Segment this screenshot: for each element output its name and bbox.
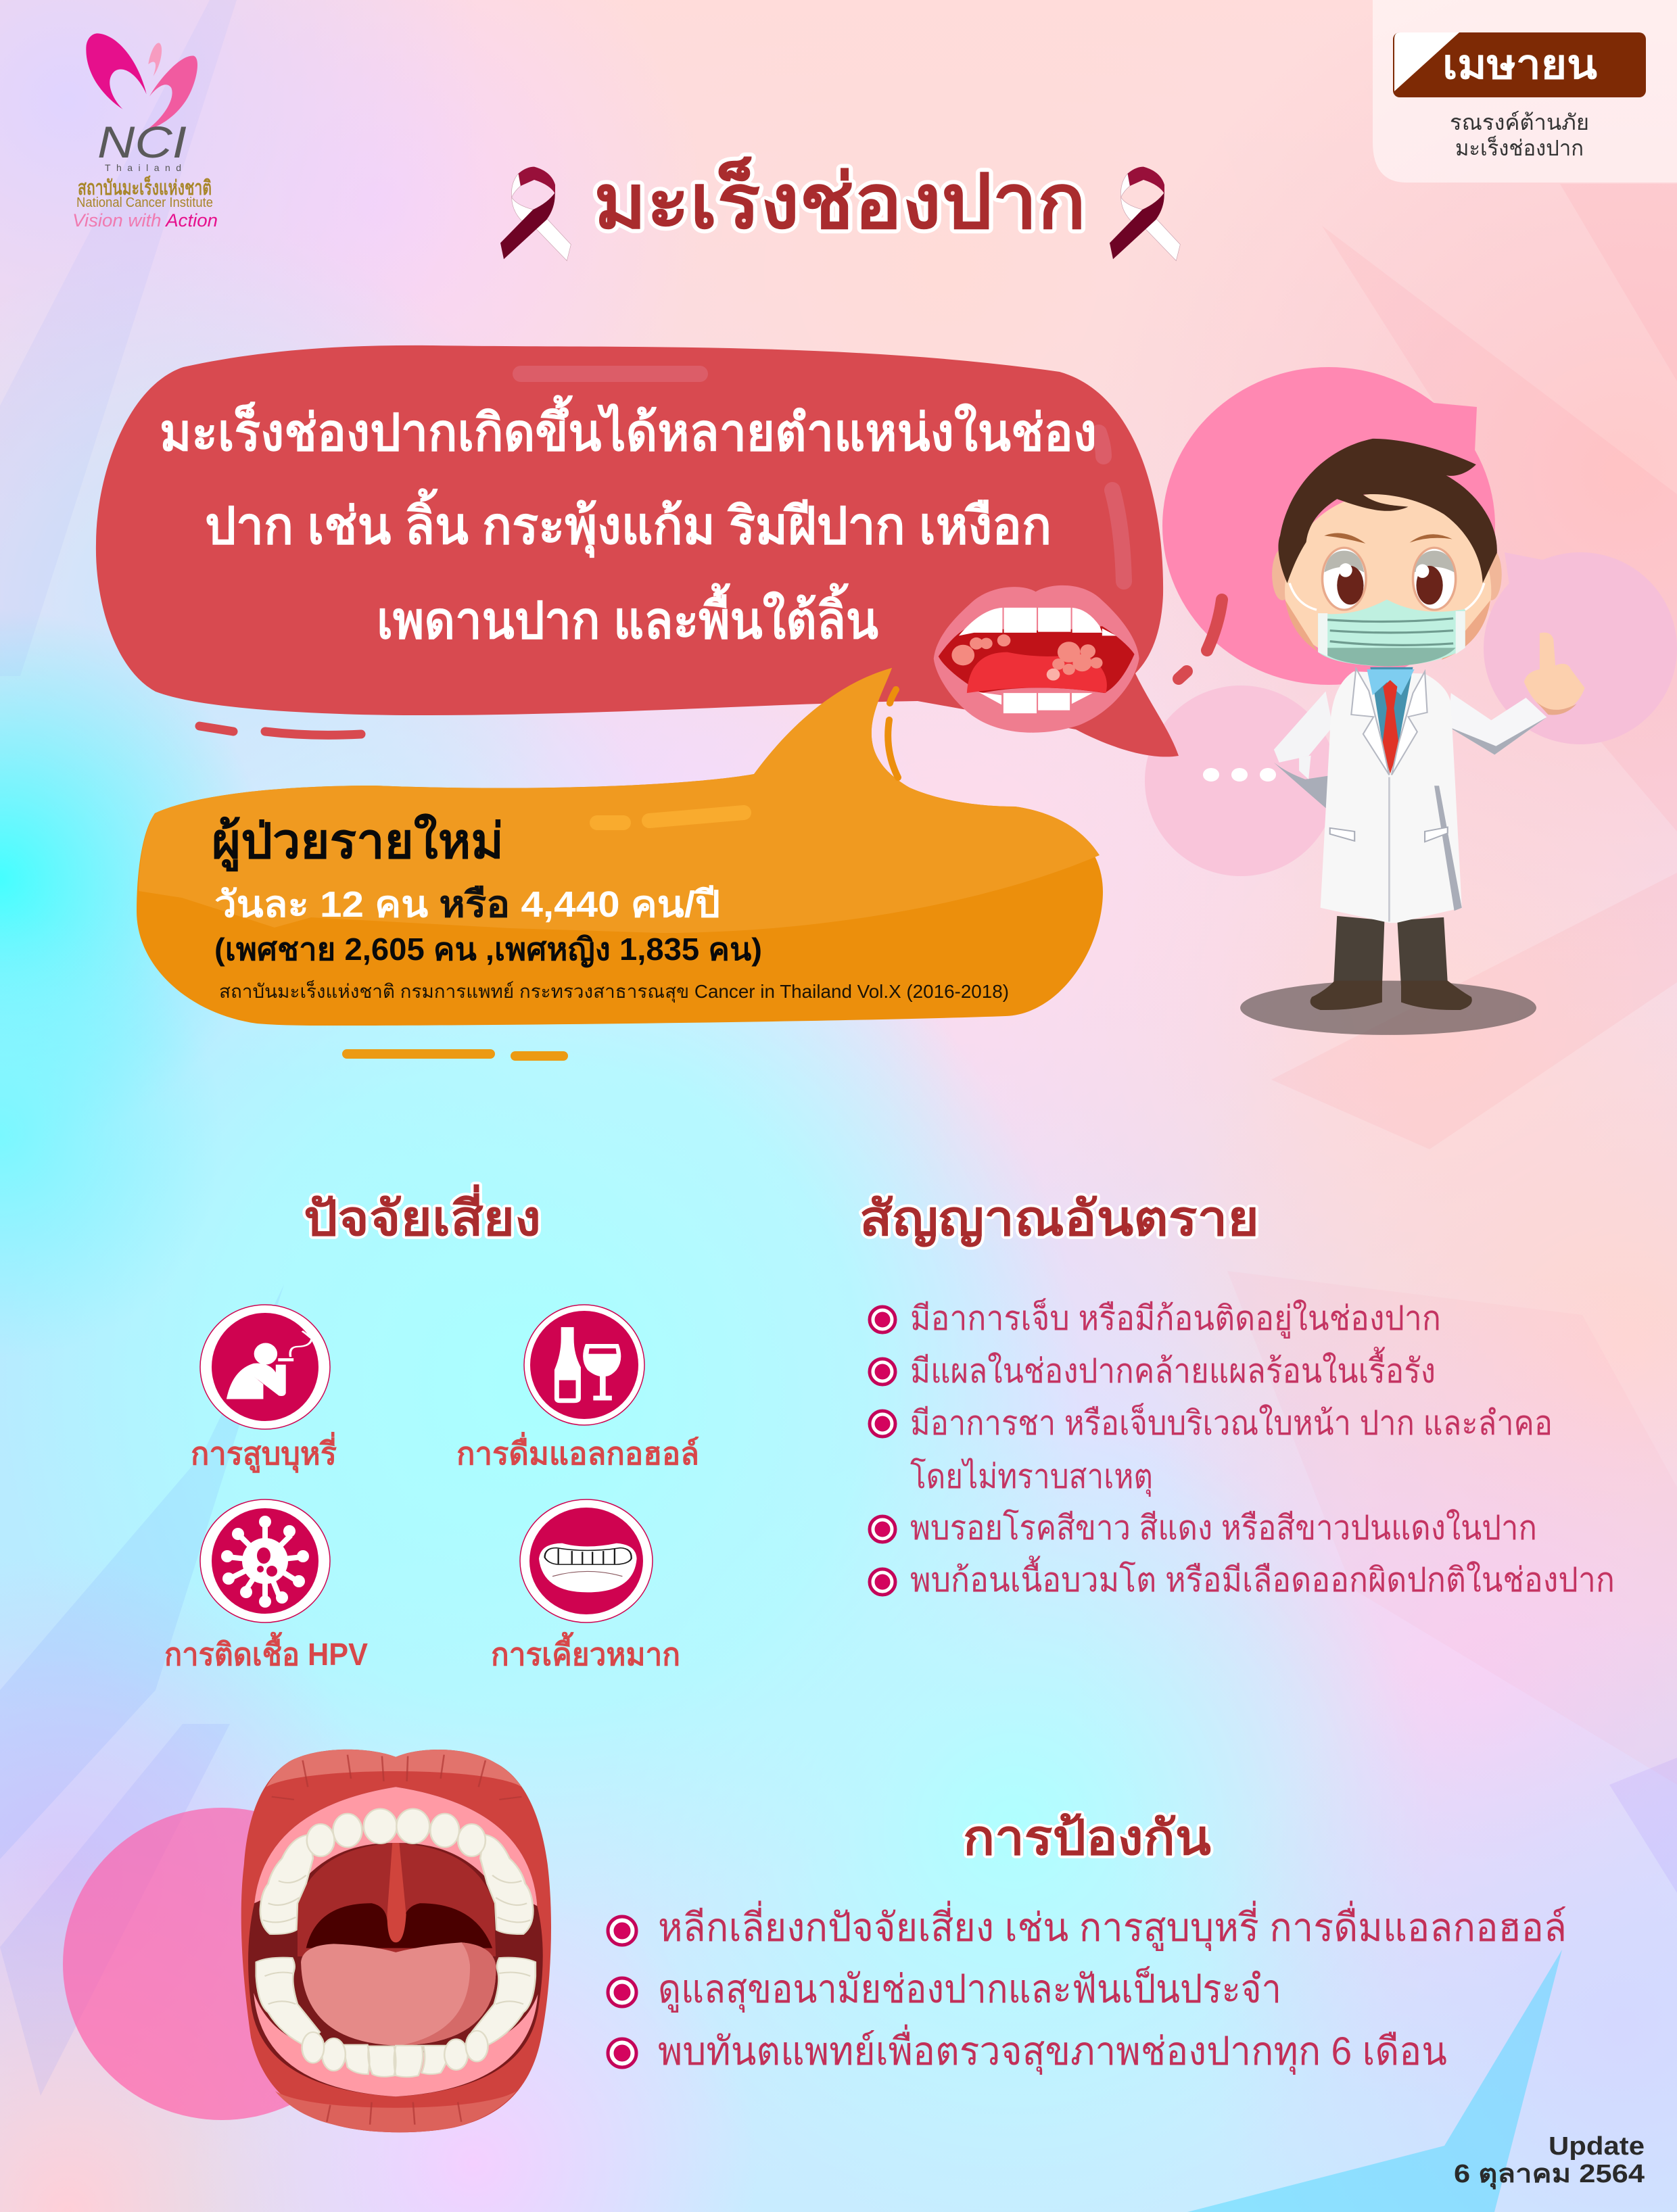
logo: National Cancer Institute: National Cancer Institute [76, 195, 213, 210]
list text: ดูแลสุขอนามัยช่องปากและฟันเป็นประจำ [658, 1966, 1281, 2013]
list text: มีแผลในช่องปากคล้ายแผลร้อนในเรื้อรัง [910, 1347, 1436, 1390]
month badge [1393, 32, 1646, 97]
list text [910, 1298, 1615, 1599]
heading: prevention: การป้องกัน [963, 1811, 1211, 1865]
pink decorative circles behind doctor [1145, 367, 1677, 876]
update date [1454, 2132, 1645, 2190]
list text: มีอาการชา หรือเจ็บบริเวณใบหน้า ปาก และลำคอ [910, 1403, 1553, 1442]
label: การดื่มแอลกอฮอล์ [456, 1432, 699, 1471]
three white dots [1203, 768, 1276, 782]
red speech bubble [96, 345, 1179, 756]
update date: Update [1549, 2132, 1645, 2161]
new patients stats: วันละ 12 คน หรือ 4,440 คน/ปี [214, 884, 720, 925]
campaign caption [1450, 110, 1589, 160]
list text: มีอาการเจ็บ หรือมีก้อนติดอยู่ในช่องปาก [910, 1298, 1441, 1339]
update date: 6 ตุลาคม 2564 [1454, 2160, 1645, 2190]
orange dashes [347, 1054, 563, 1056]
campaign caption: รณรงค์ต้านภัย [1450, 110, 1589, 135]
top right month panel [1373, 0, 1677, 183]
exclamation mark [1179, 600, 1222, 679]
title: มะเร็งช่องปาก [594, 156, 1086, 244]
bubble text: มะเร็งช่องปากเกิดขึ้นได้หลายตำแหน่งในช่อง [160, 395, 1097, 462]
list text: พบทันตแพทย์เพื่อตรวจสุขภาพช่องปากทุก 6 เดือน [658, 2024, 1447, 2075]
new patients heading: ผู้ป่วยรายใหม่ [212, 813, 504, 872]
label: การสูบบุหรี่ [191, 1432, 337, 1473]
warning signs list [870, 1298, 1615, 1599]
source: สถาบันมะเร็งแห่งชาติ กรมการแพทย์ กระทรวงสาธารณสุข Cancer in Thailand Vol.X (2016-2018) [219, 980, 1009, 1003]
label: การเคี้ยวหมาก [491, 1631, 680, 1672]
risk: smoking [191, 1305, 337, 1473]
logo: National Cancer Institute [72, 33, 218, 231]
bubble text: เพดานปาก และพื้นใต้ลิ้น [377, 583, 878, 650]
campaign caption: มะเร็งช่องปาก [1455, 135, 1584, 160]
heading: warning signs: สัญญาณอันตราย [859, 1192, 1259, 1247]
bullets [608, 1917, 636, 2067]
heading: risk factors: ปัจจัยเสี่ยง [304, 1184, 541, 1246]
bullets [870, 1307, 895, 1595]
doctor character [1240, 439, 1585, 1035]
bubble text: ปาก เช่น ลิ้น กระพุ้งแก้ม ริมฝีปาก เหงือก [205, 488, 1052, 558]
gender breakdown: (เพศชาย 2,605 คน ,เพศหญิง 1,835 คน) [214, 932, 762, 967]
bubble text [160, 395, 1097, 650]
prevention list [608, 1900, 1567, 2075]
risk: betel chewing [491, 1499, 680, 1672]
logo: National Cancer Institute: สถาบันมะเร็งแห่งชาติ [78, 175, 212, 199]
icon: right ribbon [1110, 167, 1180, 261]
icon: mouth with sores [934, 585, 1139, 733]
red dashes [199, 726, 361, 735]
logo: National Cancer Institute: Vision with Action [72, 210, 218, 231]
list text: พบรอยโรคสีขาว สีแดง หรือสีขาวปนแดงในปาก [910, 1509, 1537, 1547]
label: การติดเชื้อ HPV [164, 1631, 368, 1672]
month badge: เมษายน [1442, 42, 1597, 87]
illustration: open mouth [241, 1750, 551, 2132]
pink circle behind big mouth [63, 1808, 381, 2120]
logo mark [86, 33, 197, 130]
orange speech bubble [137, 668, 1103, 1026]
risk: HPV infection [164, 1499, 368, 1672]
list text: หลีกเลี่ยงกปัจจัยเสี่ยง เช่น การสูบบุหรี่ การดื่มแอลกอฮอล์ [658, 1900, 1567, 1952]
logo: National Cancer Institute: Thailand [105, 162, 181, 173]
list text [658, 1900, 1567, 2075]
list text: พบก้อนเนื้อบวมโต หรือมีเลือดออกผิดปกติในช่องปาก [910, 1556, 1615, 1599]
list text: โดยไม่ทราบสาเหตุ [910, 1458, 1153, 1497]
risk: alcohol [456, 1305, 699, 1471]
logo: National Cancer Institute: NCI [97, 117, 187, 167]
icon: left ribbon [500, 167, 571, 261]
molars [260, 1835, 313, 1934]
